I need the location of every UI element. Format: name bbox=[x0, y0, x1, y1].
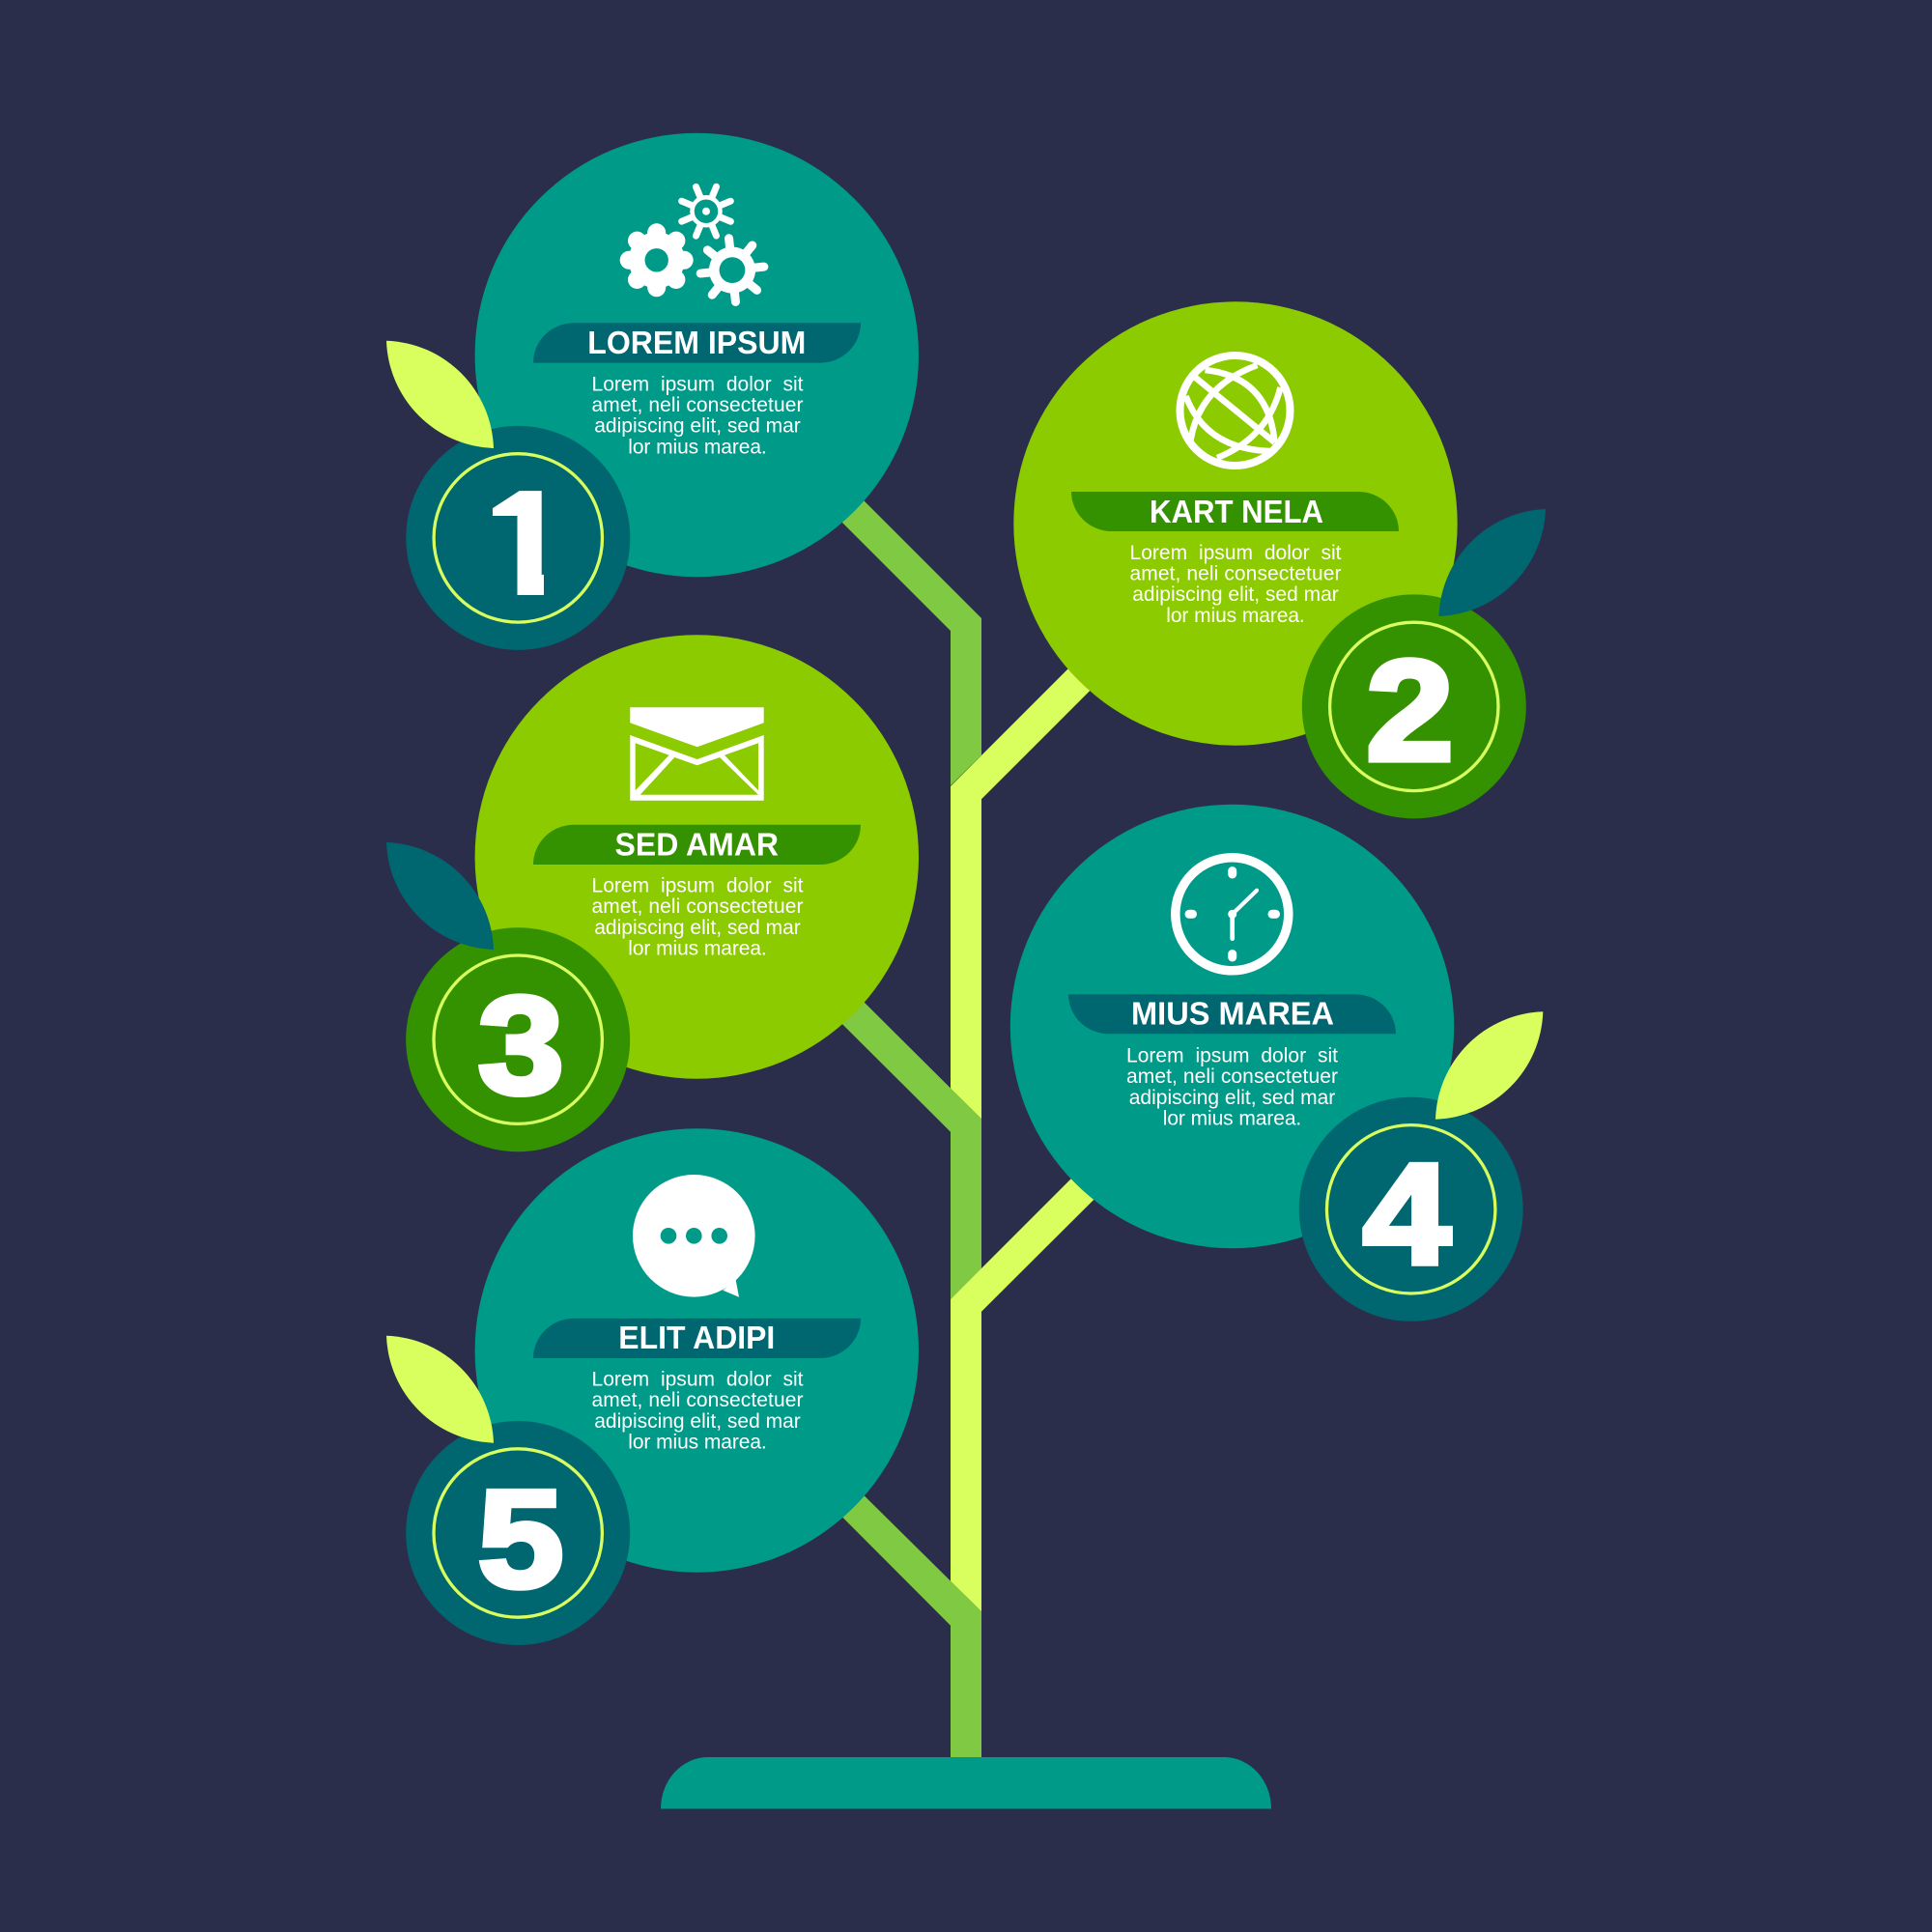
body text: amet, neli consectetuer bbox=[591, 394, 804, 416]
leaf bbox=[386, 842, 494, 950]
heading: MIUS MAREA bbox=[1131, 995, 1334, 1032]
icon: envelope bbox=[630, 707, 764, 801]
leaf bbox=[386, 341, 494, 448]
number badge 2: 2 bbox=[1366, 630, 1454, 790]
heading: ELIT ADIPI bbox=[618, 1320, 775, 1355]
branch: step 2 connector bbox=[951, 611, 1147, 1119]
branch: step 5 connector bbox=[784, 1438, 981, 1757]
body text: lor mius marea. bbox=[628, 938, 767, 960]
body text: lor mius marea. bbox=[628, 436, 767, 458]
number badge 5: 5 bbox=[478, 1462, 563, 1617]
body text: Lorem ipsum dolor sit bbox=[591, 373, 804, 395]
branch: step 3 connector bbox=[784, 945, 981, 1299]
body text bbox=[1130, 542, 1342, 627]
body text bbox=[591, 1368, 804, 1454]
body text: lor mius marea. bbox=[628, 1432, 767, 1454]
panel: step 1 bbox=[386, 133, 919, 650]
leaf bbox=[1439, 509, 1546, 616]
body text bbox=[591, 373, 804, 458]
body text: adipiscing elit, sed mar bbox=[1132, 583, 1339, 606]
panel circle bbox=[1010, 805, 1454, 1248]
number badge 4 bbox=[1299, 1097, 1523, 1321]
body text: amet, neli consectetuer bbox=[591, 1389, 804, 1411]
panel: step 4 bbox=[1010, 805, 1543, 1321]
number badge 3 bbox=[406, 927, 630, 1151]
body text bbox=[591, 875, 804, 960]
icon: gears bbox=[629, 177, 767, 305]
body text: Lorem ipsum dolor sit bbox=[1126, 1045, 1338, 1066]
body text: adipiscing elit, sed mar bbox=[594, 1410, 801, 1433]
branch: step 4 connector bbox=[951, 1122, 1151, 1611]
tree base bbox=[661, 1757, 1271, 1808]
panel circle bbox=[475, 1128, 919, 1573]
body text bbox=[1126, 1045, 1338, 1130]
panel: step 2 bbox=[1013, 301, 1546, 818]
panel: step 5 bbox=[386, 1128, 919, 1645]
body text: lor mius marea. bbox=[1163, 1108, 1301, 1130]
body text: amet, neli consectetuer bbox=[1126, 1065, 1338, 1088]
heading banner bbox=[1068, 994, 1396, 1034]
number badge 5 bbox=[406, 1421, 630, 1645]
tree trunk and branches bbox=[784, 443, 1151, 1757]
number badge 1: 1 bbox=[486, 464, 565, 623]
body text: adipiscing elit, sed mar bbox=[594, 415, 801, 438]
body text: Lorem ipsum dolor sit bbox=[591, 1368, 804, 1391]
number badge 3: 3 bbox=[478, 968, 564, 1123]
leaf bbox=[386, 1336, 494, 1443]
heading banner bbox=[533, 825, 861, 865]
body text: amet, neli consectetuer bbox=[1130, 562, 1341, 585]
panel circle bbox=[475, 635, 919, 1079]
heading: SED AMAR bbox=[615, 827, 779, 862]
panel: step 3 bbox=[386, 635, 919, 1151]
body text: adipiscing elit, sed mar bbox=[594, 917, 801, 939]
body text: amet, neli consectetuer bbox=[591, 895, 804, 918]
panel circle bbox=[475, 133, 919, 577]
heading banner bbox=[533, 1319, 861, 1358]
heading: LOREM IPSUM bbox=[587, 325, 806, 360]
leaf bbox=[1435, 1011, 1543, 1120]
number badge 4: 4 bbox=[1363, 1134, 1451, 1293]
icon: globe bbox=[1180, 355, 1291, 466]
body text: adipiscing elit, sed mar bbox=[1129, 1087, 1335, 1109]
body text: Lorem ipsum dolor sit bbox=[591, 875, 804, 896]
branch: step 1 connector bbox=[784, 443, 981, 785]
number badge 1 bbox=[406, 426, 630, 650]
number badge 2 bbox=[1302, 594, 1526, 818]
body text: lor mius marea. bbox=[1166, 605, 1305, 627]
heading: KART NELA bbox=[1150, 494, 1323, 529]
body text: Lorem ipsum dolor sit bbox=[1130, 542, 1342, 564]
icon: clock bbox=[1176, 858, 1289, 971]
panel circle bbox=[1013, 301, 1458, 746]
heading banner bbox=[1071, 492, 1399, 531]
icon: speech bubble bbox=[633, 1175, 755, 1297]
heading banner bbox=[533, 323, 861, 363]
